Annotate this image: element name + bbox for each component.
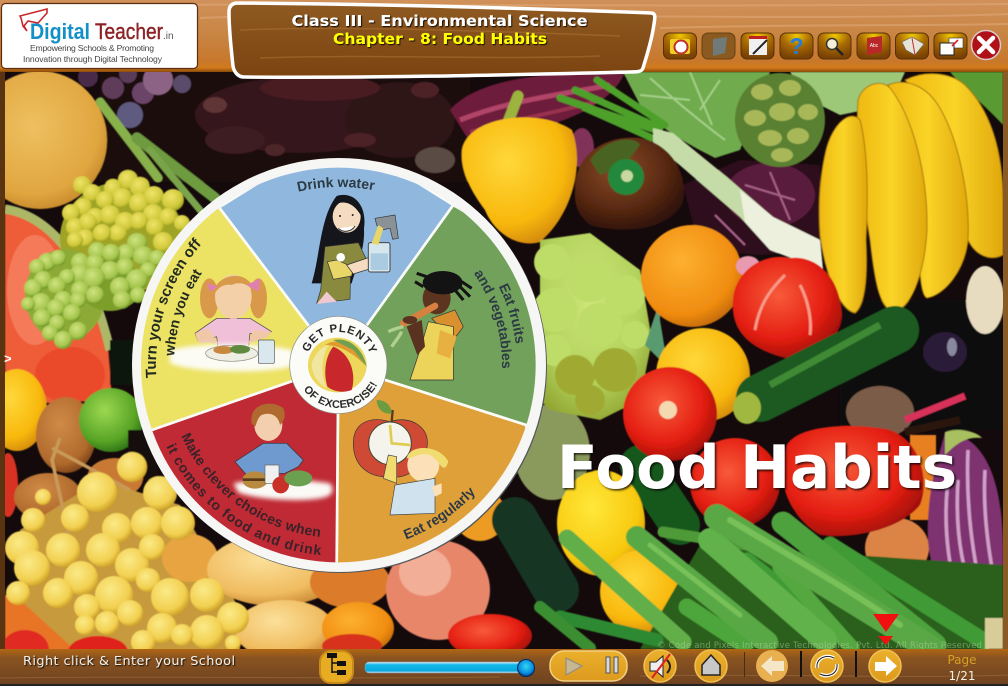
radicchio — [683, 160, 820, 255]
lower tomato — [690, 438, 780, 528]
page number: 1/21 — [949, 669, 975, 683]
dark gap right of melon — [110, 340, 135, 385]
cucumber — [760, 330, 895, 398]
top wooden header bar — [0, 0, 1008, 72]
lemon — [557, 470, 645, 576]
icon: muted speaker button — [644, 650, 676, 682]
oranges — [641, 225, 743, 327]
logo word: Digital: Digital — [30, 19, 90, 44]
peach and orange bits — [865, 518, 929, 578]
illustration: girl drinking water — [312, 195, 398, 304]
wheel sectors — [113, 133, 587, 617]
green cucumber behind lemon — [640, 465, 680, 525]
bottom wooden control bar — [0, 649, 1008, 686]
purple grapes — [78, 65, 191, 128]
red pointer: upper triangle — [873, 614, 899, 632]
play and pause pill — [550, 651, 627, 681]
red pointer: lower triangle — [878, 636, 893, 645]
brown pepper — [575, 138, 684, 230]
hub text: GET PLENTY — [302, 324, 378, 352]
asparagus — [100, 102, 215, 210]
icon: dictionary button: Abc — [870, 43, 879, 49]
lower artichoke — [514, 404, 590, 500]
logo tagline: Empowering Schools & Promoting — [30, 43, 154, 53]
yellow pepper — [503, 96, 518, 135]
green beans — [540, 517, 1003, 649]
caption: eat regularly: Eat regularly — [403, 488, 475, 540]
dark gap under bananas — [840, 300, 1003, 430]
logo word: Teacher: Teacher — [95, 19, 163, 44]
wheel captions — [146, 177, 524, 556]
left lemon — [0, 369, 47, 451]
watermelon — [5, 206, 112, 403]
right eggplant — [928, 432, 1003, 632]
artichoke — [735, 73, 825, 167]
progress bar — [365, 660, 534, 676]
illustration: girl eating at table — [170, 275, 295, 371]
illustration: apple clock and boy — [353, 400, 448, 515]
title text: Class III - Environmental Science — [292, 12, 588, 30]
brown fruit behind grapes — [13, 472, 79, 516]
caption: drink water: Drink water — [297, 177, 375, 192]
caption: make clever choices: Make clever choices when — [182, 432, 320, 537]
potatoes — [162, 534, 218, 582]
leek leaves — [560, 80, 665, 138]
icon: help button — [780, 33, 813, 59]
page number — [947, 653, 977, 683]
leek stem — [653, 128, 823, 270]
chapter text: Chapter - 8: Food Habits — [333, 30, 547, 48]
icon: magnifier button — [818, 33, 851, 59]
yellow grape bed — [5, 595, 75, 650]
logo word: .in: .in — [163, 31, 174, 42]
icon: notepad button — [741, 33, 774, 59]
green grapes — [60, 182, 184, 294]
cabbage — [623, 72, 770, 158]
pink beet leaf — [905, 396, 965, 420]
separator three — [855, 651, 857, 677]
tomato bottom middle — [322, 602, 394, 654]
yellow grapes — [5, 452, 249, 654]
illustration: boy choosing food — [233, 404, 333, 500]
hub text — [302, 324, 378, 408]
grape stem — [52, 438, 130, 540]
toolbar buttons — [664, 30, 1000, 60]
icon: reload button — [811, 650, 843, 682]
hub — [290, 316, 387, 414]
caption: make clever choices: it comes to food and drink — [166, 442, 322, 556]
hub text: OF EXCERCISE! — [304, 382, 377, 408]
tomato — [623, 367, 717, 461]
caption: turn your screen off: when you eat — [165, 269, 202, 356]
lower orange — [600, 550, 684, 634]
caption: eat fruits and vegetables: and vegetables — [474, 270, 512, 368]
icon: close button — [972, 30, 1000, 60]
separator two — [800, 651, 802, 677]
big heading: Food Habits: Food Habits — [557, 433, 957, 503]
icon: window resize button — [934, 33, 967, 59]
bananas — [819, 74, 1003, 313]
food habits wheel — [132, 158, 547, 573]
illustration: boy eating carrot — [388, 271, 472, 380]
garlic — [966, 266, 1004, 334]
separator one — [744, 652, 745, 677]
big red pepper — [782, 426, 924, 536]
dark red lettuce — [100, 72, 470, 182]
copyright line: © Code and Pixels Interactive Technologies. Pvt. Ltd. All Rights Reserved — [657, 641, 982, 651]
icon: help button: ? — [789, 33, 804, 59]
icon: forward arrow button — [869, 650, 901, 682]
icon: sitemap button — [320, 651, 353, 683]
icon: planner button — [664, 33, 696, 59]
wheel outer ring — [133, 159, 547, 573]
cantaloupe — [0, 71, 107, 209]
title plaque — [229, 3, 655, 77]
left collapse arrow: > — [4, 351, 12, 366]
page number: Page — [947, 653, 977, 667]
yellow fruit behind wheel — [461, 498, 503, 542]
kiwi fruit — [36, 397, 96, 473]
onion — [386, 540, 490, 640]
icon: graduation cap — [20, 9, 47, 31]
icon: home button — [695, 650, 727, 682]
lime — [79, 388, 143, 452]
red left edge — [5, 452, 19, 518]
school prompt text: Right click & Enter your School — [23, 654, 235, 669]
icon: open book button — [896, 33, 928, 59]
romanesco — [540, 233, 652, 420]
logo panel — [2, 4, 198, 68]
pink bit — [736, 256, 760, 276]
icon: reference book button — [702, 33, 735, 59]
caption: eat fruits and vegetables: Eat fruits — [499, 283, 524, 344]
caption: turn your screen off: Turn your screen off — [146, 237, 201, 378]
red pepper upper — [733, 257, 842, 358]
icon: dictionary button — [857, 33, 890, 59]
logo tagline: Innovation through Digital Technology — [23, 54, 163, 64]
eggplant top — [450, 72, 625, 142]
icon: back arrow button — [756, 650, 788, 682]
beet — [846, 386, 914, 438]
red tomatoes bottom left — [5, 630, 50, 649]
dark cucumber — [515, 520, 556, 590]
